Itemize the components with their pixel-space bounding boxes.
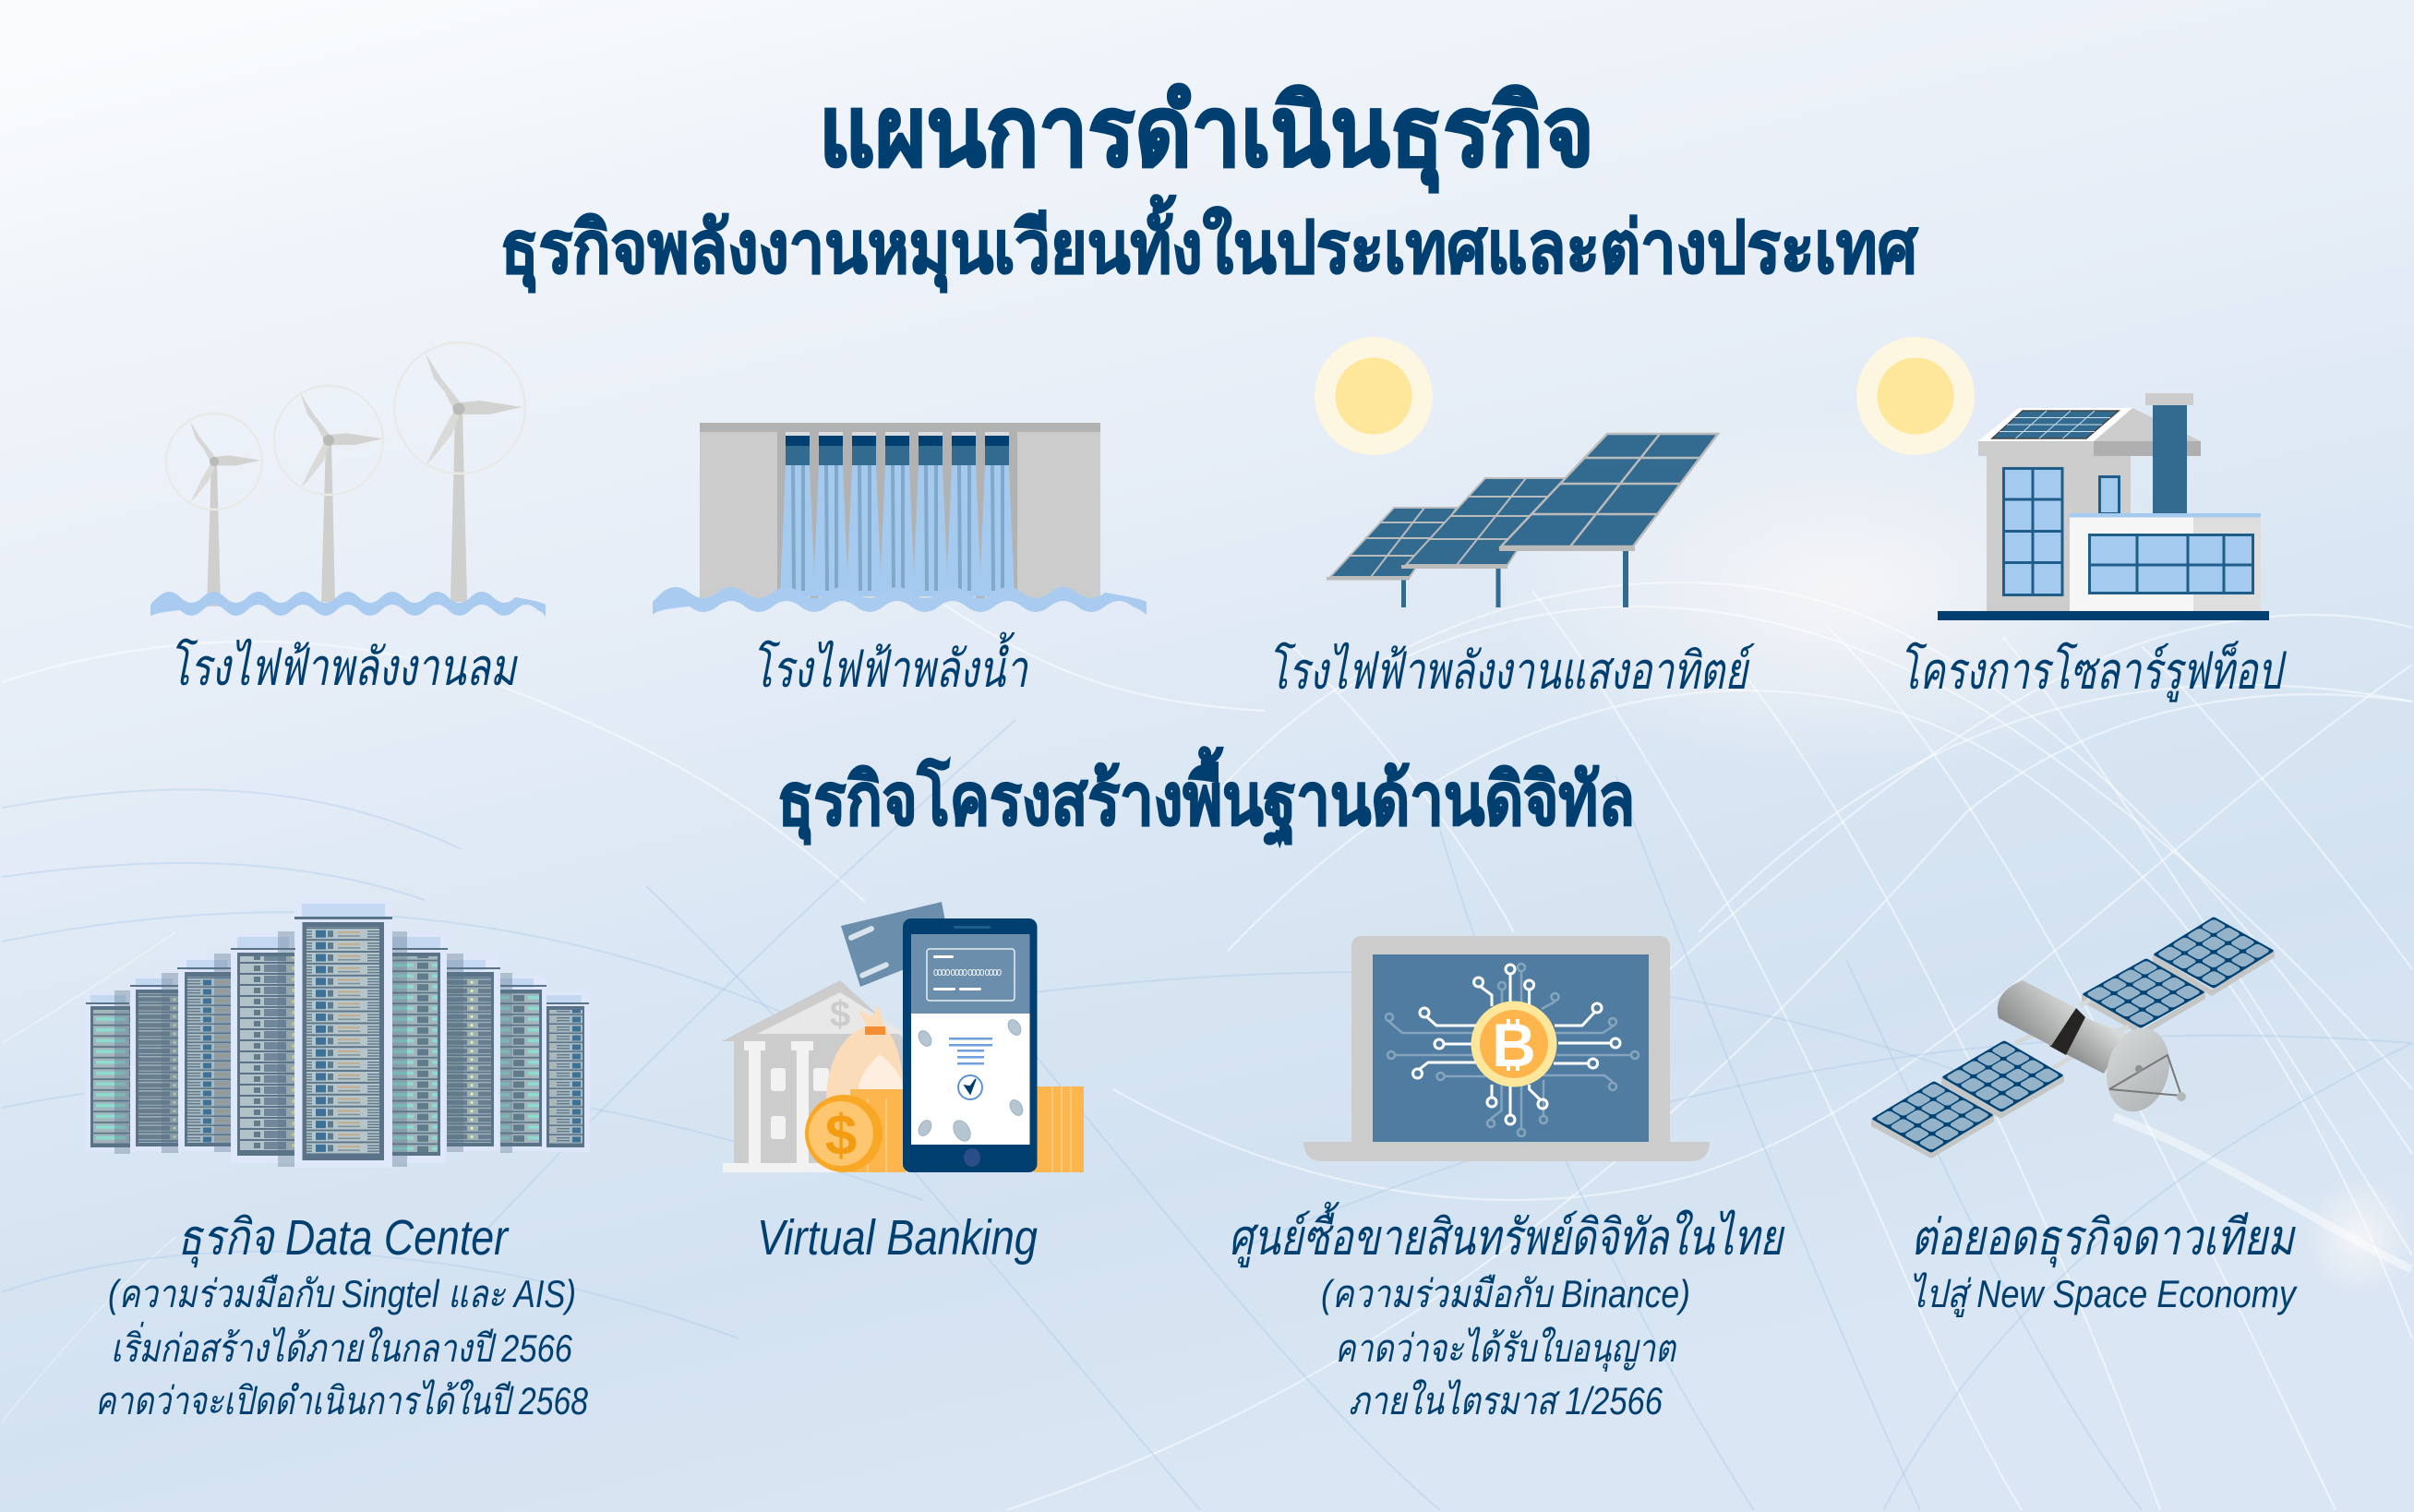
panel: hydro power <box>653 423 1147 698</box>
text: licence expected: คาดว่าจะได้รับใบอนุญาต <box>1335 1326 1677 1372</box>
icon: dam with gates <box>653 423 1147 615</box>
icon: bank, coins and phone <box>722 902 1084 1172</box>
text: Binance partnership: (ความร่วมมือกับ Binance) <box>1321 1272 1690 1315</box>
panel: virtual banking <box>722 902 1084 1266</box>
icon: bank, coins and phone: $ <box>825 1104 857 1168</box>
icon: solar panels <box>1327 434 1718 607</box>
icon: sun <box>1315 337 1433 455</box>
heading: digital infrastructure business: ธุรกิจโครงสร้างพื้นฐานด้านดิจิทัล <box>777 747 1635 846</box>
icon: building with rooftop solar <box>1938 393 2269 620</box>
label: satellite business: ต่อยอดธุรกิจดาวเทียม <box>1911 1210 2296 1268</box>
icon: bank, coins and phone: $ <box>830 994 850 1035</box>
text: opening date: คาดว่าจะเปิดดำเนินการได้ในปี 2568 <box>95 1379 589 1422</box>
panel: data center <box>85 899 590 1422</box>
label: digital asset exchange: ศูนย์ซื้อขายสินทรัพย์ดิจิทัลในไทย <box>1229 1201 1785 1268</box>
panel: digital asset exchange <box>1229 936 1785 1422</box>
panel: wind power <box>150 342 546 696</box>
text: data center partners: (ความร่วมมือกับ Singtel และ AIS) <box>108 1272 576 1315</box>
icon: laptop with bitcoin: B <box>1492 1011 1536 1079</box>
icon: laptop with bitcoin <box>1303 936 1710 1161</box>
text: New Space Economy: ไปสู่ New Space Economy <box>1909 1272 2299 1317</box>
panel: satellite <box>1871 917 2299 1317</box>
panel: solar farm <box>1267 337 1755 700</box>
text: construction start: เริ่มก่อสร้างได้ภายในกลางปี 2566 <box>111 1321 573 1370</box>
label: hydro power: โรงไฟฟ้าพลังน้ำ <box>751 631 1028 698</box>
label: solar rooftop: โครงการโซลาร์รูฟท็อป <box>1899 641 2288 702</box>
label: virtual banking: Virtual Banking <box>757 1210 1038 1266</box>
icon: wind turbines <box>150 342 546 617</box>
label: solar farm: โรงไฟฟ้าพลังงานแสงอาทิตย์ <box>1267 642 1755 700</box>
label: wind power: โรงไฟฟ้าพลังงานลม <box>169 638 518 696</box>
label: data center: ธุรกิจ Data Center <box>177 1210 510 1268</box>
icon: satellite <box>1871 917 2275 1158</box>
icon: sun <box>1856 337 1975 455</box>
icon: server racks <box>85 899 590 1168</box>
text: licence timing: ภายในไตรมาส 1/2566 <box>1349 1379 1663 1422</box>
panel: solar rooftop <box>1856 337 2288 702</box>
subtitle: renewable energy business: ธุรกิจพลังงานหมุนเวียนทั้งในประเทศและต่างประเทศ <box>500 195 1918 293</box>
icon: bank, coins and phone: 0000 0000 0000 0000 <box>933 968 1002 978</box>
title: แผนการดำเนินธุรกิจ <box>819 78 1594 193</box>
